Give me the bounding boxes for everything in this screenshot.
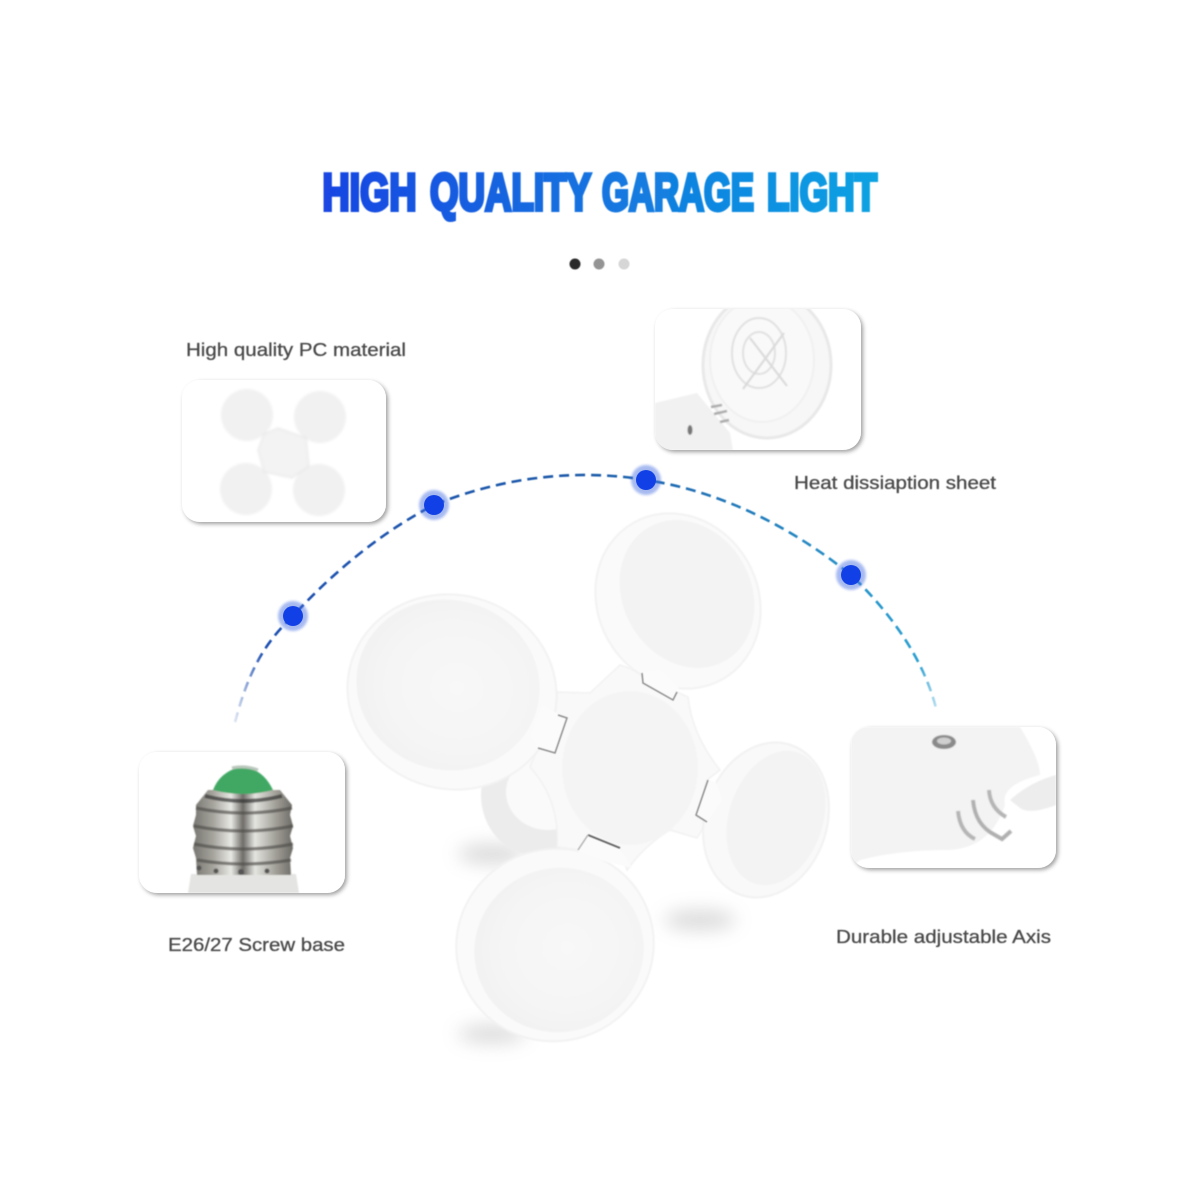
left lamp panel [325, 571, 579, 813]
centre hub [530, 665, 720, 870]
axis detail [851, 727, 1056, 868]
back lamp panel [481, 735, 590, 855]
hinges [538, 673, 708, 850]
dashed arc connector [235, 475, 937, 722]
panel: PC material [182, 380, 386, 522]
label: adjustable axis: Durable adjustable Axis [836, 926, 1051, 947]
title: HIGH [322, 164, 416, 222]
pagination dots [570, 258, 630, 270]
bottom lamp panel [431, 823, 679, 1067]
panel: heat dissipation sheet [655, 292, 861, 450]
title: QUALITY [430, 164, 591, 222]
panel: screw base [139, 752, 345, 893]
arc node markers [278, 465, 866, 631]
right lamp panel [684, 726, 848, 914]
hinge tabs [530, 670, 722, 868]
label: PC material: High quality PC material [186, 339, 406, 360]
panel: adjustable axis [851, 727, 1056, 868]
mini lamp top view [220, 389, 346, 516]
title: LIGHT [767, 164, 877, 222]
top lamp panel [564, 483, 792, 719]
title [322, 164, 877, 222]
label: heat sheet: Heat dissiaption sheet [794, 472, 996, 493]
label: screw base: E26/27 Screw base [168, 934, 345, 955]
heat sheet detail [655, 292, 831, 450]
icon: E26 screw base [188, 767, 299, 893]
title: GARAGE [602, 164, 754, 222]
ground shadows [458, 844, 736, 1043]
main product: folding garage light [325, 483, 848, 1067]
